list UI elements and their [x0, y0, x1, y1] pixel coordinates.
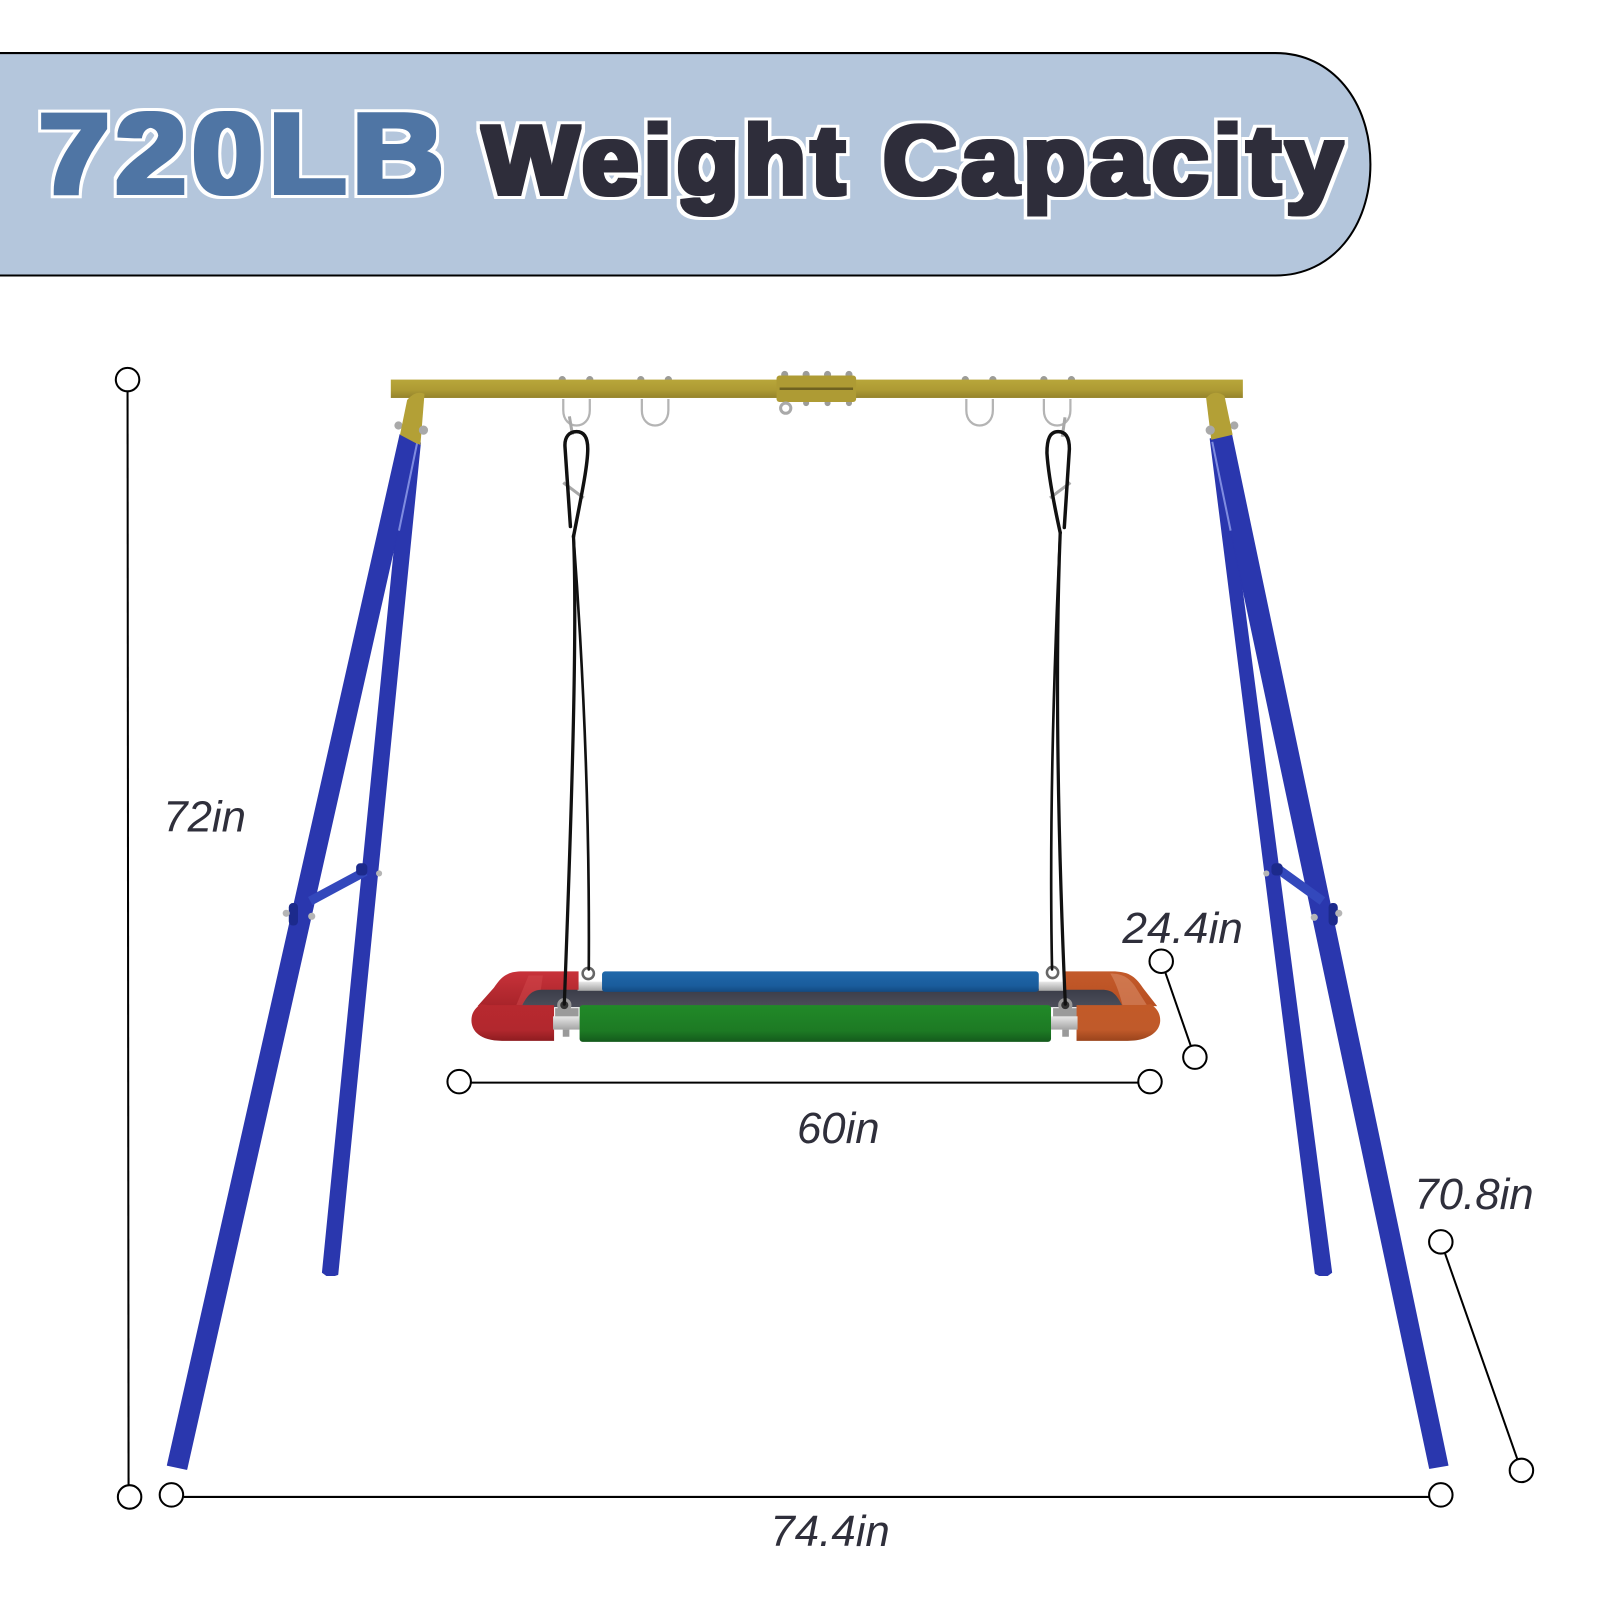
title: 720LB: 720LB [39, 90, 443, 218]
dimension: side length 70.8in: 70.8in [1414, 1170, 1534, 1219]
back clamp left [578, 968, 603, 991]
right back leg [1210, 439, 1332, 1276]
left brace [283, 863, 382, 926]
dimension: side length 70.8in [1414, 1170, 1534, 1482]
dimension: seat depth 24.4in: 24.4in [1121, 904, 1243, 953]
clip [1050, 417, 1070, 498]
right yellow bracket [1206, 393, 1238, 440]
dimension: height 72in: 72in [163, 793, 246, 842]
clip [563, 416, 584, 498]
blue tube [602, 971, 1039, 992]
hanging hooks [559, 376, 1075, 426]
left back leg [322, 441, 420, 1276]
mat [518, 989, 1124, 1007]
title banner [0, 53, 1370, 276]
right front leg [1211, 435, 1448, 1468]
dimension: seat width 60in [447, 1070, 1162, 1153]
rope strands [1057, 533, 1065, 1004]
swing seat platform [471, 967, 1160, 1042]
beam centre sleeve [777, 371, 856, 413]
left rope [563, 416, 589, 1004]
front clamp right [1051, 999, 1078, 1037]
carabiner loop [1047, 432, 1069, 533]
rope strands [564, 536, 575, 1004]
swing frame [167, 371, 1448, 1469]
dimension: seat depth 24.4in [1121, 904, 1243, 1069]
right brace [1263, 863, 1342, 926]
title: Weight Capacity: Weight Capacity [483, 107, 1343, 215]
carabiner loop [565, 432, 588, 537]
dimension: seat width 60in: 60in [797, 1104, 880, 1153]
dimension: base width 74.4in [160, 1483, 1453, 1556]
right rope [1047, 417, 1070, 1004]
front clamp left [553, 999, 580, 1037]
left front leg [167, 435, 418, 1469]
back clamp right [1039, 967, 1064, 991]
red corner [471, 971, 579, 1041]
banner background [0, 53, 1370, 276]
left yellow bracket [394, 393, 428, 445]
dimension: height 72in [116, 368, 246, 1509]
dimension: base width 74.4in: 74.4in [770, 1507, 890, 1556]
top beam [391, 380, 1243, 398]
orange corner [1063, 971, 1160, 1041]
green tube [580, 1005, 1051, 1042]
